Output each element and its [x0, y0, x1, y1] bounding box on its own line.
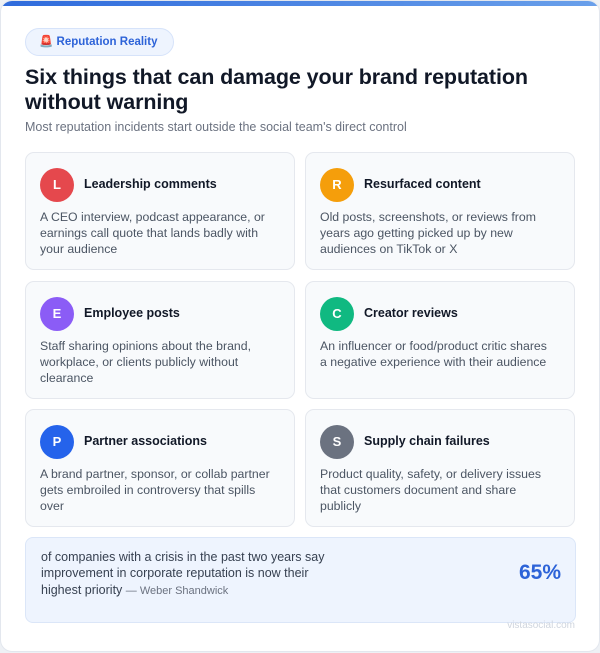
card: leadership: Leadership comments — [84, 177, 217, 191]
card: leadership — [25, 152, 295, 270]
subtitle: Most reputation incidents start outside the social team's direct control — [25, 120, 407, 134]
card: supply: Supply chain failures — [364, 434, 490, 448]
card: partner: A brand partner, sponsor, or collab partner gets embroiled in controversy that spills over — [40, 467, 270, 513]
card: creator — [305, 281, 575, 399]
card: employee — [25, 281, 295, 399]
card: supply: Product quality, safety, or delivery issues that customers document and share publicly — [320, 467, 541, 513]
badge — [25, 28, 174, 56]
card: leadership: A CEO interview, podcast appearance, or earnings call quote that lands badly with your audience — [40, 210, 265, 256]
stat callout: of companies with a crisis in the past two years say improvement in corporate reputation is now their highest priority — Weber Shandwick — [41, 550, 324, 597]
card: creator: An influencer or food/product critic shares a negative experience with their audience — [320, 339, 547, 369]
badge: 🚨 Reputation Reality — [39, 36, 157, 48]
card: resurfaced: Resurfaced content — [364, 177, 481, 191]
card: resurfaced: Old posts, screenshots, or reviews from years ago getting picked up by new audiences on TikTok or X — [320, 210, 536, 256]
stat callout: 65% — [519, 561, 561, 584]
card: partner: P — [53, 434, 61, 449]
card: partner — [25, 409, 295, 527]
card: supply — [305, 409, 575, 527]
card: employee: Staff sharing opinions about the brand, workplace, or clients publicly without clearance — [40, 339, 251, 385]
card: supply: S — [333, 434, 341, 449]
card: creator: Creator reviews — [364, 306, 458, 320]
card: creator: C — [332, 306, 342, 321]
card: employee: E — [53, 306, 61, 321]
card: employee: Employee posts — [84, 306, 180, 320]
card: resurfaced: R — [332, 177, 342, 192]
stat callout — [25, 537, 576, 623]
card: resurfaced — [305, 152, 575, 270]
card: partner: Partner associations — [84, 434, 207, 448]
title: Six things that can damage your brand reputation without warning — [25, 65, 528, 114]
card: leadership: L — [53, 177, 61, 192]
footer: vistasocial.com — [507, 620, 575, 631]
